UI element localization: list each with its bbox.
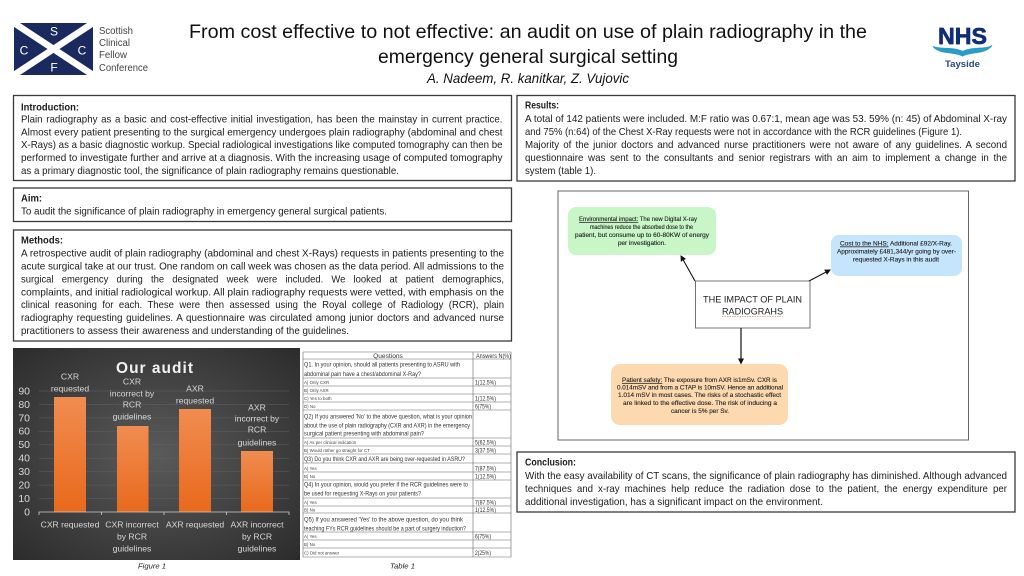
logo: Scottish Clinical Fellow Conference: Conference: [99, 63, 148, 74]
arrow: to cost to the NHS: [809, 270, 830, 281]
y axis labels: 40: [18, 452, 30, 464]
question 1: 1(12.5%): [475, 380, 496, 386]
question 1: Q1. In your opinion, should all patients presenting to ASRU with: [304, 362, 460, 368]
text block: methods: surgical emergency during the designated week were included. We looked at patient demographics,: [21, 274, 504, 286]
text block: introduction: as a primary diagnostic tool, the significance of plain radiography remains questionable.: [21, 166, 399, 177]
y axis labels: 60: [18, 426, 30, 438]
question 5: [304, 516, 491, 557]
card: cost to the NHS: Cost to the NHS: Additional £92/X-Ray.: [840, 240, 952, 248]
text block: methods: A retrospective audit of plain radiography (abdominal and chest X-Rays) requests in patients presenting to the: [21, 248, 504, 260]
data labels: CXR: [61, 372, 79, 382]
question 2: [304, 414, 496, 454]
heading: aim: Aim:: [21, 194, 42, 204]
question 2: about the use of plain radiography (CXR and AXR) in the emergency: [304, 422, 471, 430]
logo: Scottish Clinical Fellow Conference: C: [78, 44, 87, 58]
card: environmental impact: machines reduce the absorbed dose to the: [590, 224, 693, 231]
table: questionnaire results: [303, 352, 511, 557]
bar chart: our audit: [13, 348, 300, 560]
arrow: to environmental impact: [681, 256, 695, 281]
data labels: RCR: [248, 424, 266, 434]
text block: results: Majority of the junior doctors and advanced nurse practitioners were not aware of any guidelines. A second: [525, 140, 1007, 151]
text block: aim: To audit the significance of plain radiography in emergency general surgical patients.: [21, 206, 387, 218]
question 3: A) Yes: [304, 466, 317, 471]
data labels: AXR: [186, 384, 204, 394]
question 4: Q4) In your opinion, would you prefer if the RCR guidelines were to: [304, 482, 468, 488]
chart title: Our audit: [116, 360, 193, 377]
logo: NHS Tayside: [933, 23, 992, 69]
panel: aim: [14, 188, 512, 222]
question 5: 2(25%): [475, 550, 491, 557]
data labels: incorrect by: [235, 414, 280, 424]
title: From cost effective to not effective: an audit on use of plain radiography in the: [189, 21, 867, 43]
question 2: A) As per clinical indication: [304, 440, 357, 445]
text block: results: system (table 1).: [525, 166, 596, 177]
text block: results: [525, 114, 1008, 177]
question 1: D) No: [304, 404, 316, 409]
card: cost to the NHS: [831, 235, 962, 276]
question 3: 7(87.5%): [475, 466, 496, 472]
x axis: [39, 512, 289, 515]
central box: the impact of plain radiographs: [696, 281, 810, 328]
panel: impact diagram: [558, 191, 968, 440]
logo: Scottish Clinical Fellow Conference: F: [50, 60, 58, 74]
data labels: RCR: [123, 400, 141, 410]
question 2: surgical patient presenting with abdominal pain?: [304, 430, 424, 438]
question 3: 1(12.5%): [475, 474, 496, 480]
question 4: [304, 482, 496, 514]
y axis labels: 30: [18, 466, 30, 478]
y axis labels: 10: [18, 493, 30, 505]
caption: figure 1: Figure 1: [138, 562, 166, 570]
bars: [54, 397, 273, 512]
text block: methods: complaints, and initial radiological workup. All plain radiography requests were vetted, with emphasis on the: [21, 288, 504, 298]
caption: table 1: Table 1: [390, 562, 415, 570]
panel: conclusion: [517, 452, 1015, 512]
question 4: 1(12.5%): [475, 507, 496, 514]
logo: NHS Tayside: Tayside: [945, 59, 980, 69]
data labels: guidelines: [238, 438, 276, 448]
card: patient safety: are linked to the effective dose. The risk of inducing a: [623, 400, 778, 407]
card: cost to the NHS: Approximately £481,344/yr going by over-: [837, 248, 956, 256]
data labels: incorrect by: [110, 388, 155, 398]
question 1: A) Only CXR: [304, 380, 329, 385]
y axis labels: 70: [18, 412, 30, 424]
text block: results: questionnaire was sent to the consultants and senior registrars with an aim to implement a change in the: [525, 153, 1007, 164]
question 1: abdominal pain have a chest/abdominal X-Ray?: [304, 371, 421, 378]
data labels: guidelines: [113, 412, 151, 422]
authors: A. Nadeem, R. kanitkar, Z. Vujovic: [426, 70, 629, 86]
card: patient safety: cancer is 5% per Sv.: [671, 408, 729, 415]
logo: Scottish Clinical Fellow Conference: Fellow: [99, 50, 128, 61]
question 5: B) No: [304, 542, 316, 547]
question 3: Q3) Do you think CXR and AXR are being over-requested in ASRU?: [304, 456, 465, 463]
text block: conclusion: [525, 471, 1008, 508]
y axis labels: 80: [18, 399, 30, 411]
data labels: requested: [51, 384, 89, 394]
text block: introduction: performed to investigate further and arrive at a diagnosis. With the increasing usage of computed tomography: [21, 153, 503, 164]
heading: results: Results:: [525, 100, 559, 112]
logo: NHS Tayside: NHS: [938, 23, 987, 49]
question 3: [304, 456, 496, 480]
table header: Answers N(%): [476, 353, 511, 360]
table header: [373, 353, 511, 360]
text block: results: and 75% (n:64) of the Chest X-Ray requests were not in accordance with the RCR guidelines (Figure 1).: [525, 127, 962, 138]
text block: results: A total of 142 patients were included. M:F ratio was 0.67:1, mean age was 53. 59% (n: 45) of Abdominal X-ray: [525, 114, 1008, 125]
data labels: [51, 372, 280, 448]
central box: the impact of plain radiographs: THE IMPACT OF PLAIN: [703, 294, 802, 306]
text block: methods: radiography requesting guidelines. A questionnaire was circulated among junior doctors and advanced nurse: [21, 313, 504, 324]
text block: conclusion: With the easy availability of CT scans, the significance of plain radiography has diminished. Although advanced: [525, 471, 1007, 482]
data labels: AXR: [248, 402, 266, 412]
card: cost to the NHS: requested X-Rays in this audit: [853, 256, 939, 264]
card: patient safety: 0.014mSV and from a CTAP is 10mSV. Hence an additional: [617, 384, 783, 392]
panel: results: [517, 96, 1015, 181]
question 5: A) Yes: [304, 534, 317, 539]
question 5: C) Did not answer: [304, 550, 340, 556]
text block: methods: clinical reasoning for each. These were then assessed using the Royal college of Radiology (RCR), plain: [21, 300, 504, 311]
question 5: Q5) If you answered 'Yes' to the above question, do you think: [304, 516, 464, 524]
heading: methods: Methods:: [21, 236, 63, 246]
question 4: 7(87.5%): [475, 500, 496, 506]
card: patient safety: 1.014 mSV in most cases. The risks of a stochastic effect: [618, 392, 781, 399]
data labels: requested: [176, 396, 214, 406]
category labels: guidelines: [238, 544, 276, 554]
panel: introduction: [14, 96, 512, 180]
text block: conclusion: additional investigation, has a significant impact on the environment.: [525, 497, 823, 508]
question 1: B) Only AXR: [304, 388, 329, 393]
question 2: 5(62.5%): [475, 440, 496, 446]
text block: methods: acute surgical take at our trust. One random on call week was chosen as the data period. All admissions to the: [21, 262, 504, 272]
question 2: Q2) If you answered 'No' to the above question, what is your opinion: [304, 414, 472, 420]
question 4: A) Yes: [304, 500, 317, 505]
logo: Scottish Clinical Fellow Conference: C: [20, 44, 29, 58]
question 5: teaching FYs RCR guidelines should be a part of surgery induction?: [304, 526, 466, 532]
text block: methods: [21, 248, 504, 337]
logo: Scottish Clinical Fellow Conference: [14, 23, 148, 75]
question 4: be used for requesting X-Rays on your patients?: [304, 490, 421, 498]
card: patient safety: Patient safety: The exposure from AXR is1mSv. CXR is: [622, 377, 777, 384]
heading: conclusion: Conclusion:: [525, 458, 576, 468]
card: environmental impact: patient, but consume up to 60-80KW of energy: [575, 232, 710, 239]
text block: methods: practitioners to assess their awareness and understanding of the guidelines.: [21, 326, 349, 337]
text block: introduction: [21, 114, 503, 177]
category labels: by RCR: [242, 532, 272, 542]
table header: Questions: [373, 353, 404, 360]
question 1: [304, 362, 496, 410]
question 1: C) Yes to both: [304, 396, 332, 401]
y axis labels: [18, 386, 30, 518]
title: emergency general surgical setting: [378, 46, 678, 68]
y axis labels: 50: [18, 439, 30, 451]
y axis labels: 20: [18, 480, 30, 492]
card: environmental impact: [568, 207, 716, 255]
question 2: 3(37.5%): [475, 448, 496, 454]
category labels: guidelines: [113, 544, 151, 554]
title: [189, 21, 867, 68]
central box: the impact of plain radiographs: RADIOGRAHS: [722, 306, 783, 318]
text block: introduction: Almost every patient presenting to the surgical emergency undergoes plain radiography (abdominal and chest: [21, 128, 503, 138]
logo: Scottish Clinical Fellow Conference: S: [50, 24, 58, 38]
category labels: by RCR: [117, 532, 147, 542]
category labels: CXR requested: [41, 520, 100, 530]
text block: conclusion: techniques and x-ray machines help reduce the radiation dose to the patient, the energy expenditure per: [525, 484, 1008, 495]
question 5: 6(75%): [475, 534, 491, 540]
question 2: B) Would rather go straight for CT: [304, 448, 370, 453]
heading: introduction: Introduction:: [21, 102, 79, 114]
data labels: CXR: [123, 376, 141, 386]
arrow: to patient safety: [740, 328, 742, 364]
card: patient safety: [611, 364, 788, 425]
text block: introduction: X-Rays) as a basic diagnostic workup. Special radiological investigations like computed tomography can then be: [21, 140, 503, 151]
category labels: AXR incorrect: [230, 520, 284, 530]
card: environmental impact: per investigation.: [618, 240, 666, 247]
category labels: AXR requested: [166, 520, 224, 530]
y axis labels: 90: [18, 386, 30, 398]
category labels: CXR incorrect: [105, 520, 159, 530]
question 1: 1(12.5%): [475, 396, 496, 402]
question 1: 6(75%): [475, 404, 491, 410]
question 4: B) No: [304, 508, 316, 512]
card: environmental impact: Environmental impact: The new Digital X-ray: [579, 216, 698, 223]
text block: introduction: Plain radiography as a basic and cost-effective initial investigation, has been the mainstay in current practice.: [21, 114, 502, 126]
y axis labels: 0: [24, 506, 30, 518]
logo: Scottish Clinical Fellow Conference: Clinical: [99, 38, 130, 49]
panel: methods: [14, 230, 512, 341]
question 3: B) No: [304, 474, 316, 479]
logo: Scottish Clinical Fellow Conference: Scottish: [99, 26, 133, 37]
category labels: [41, 520, 284, 554]
